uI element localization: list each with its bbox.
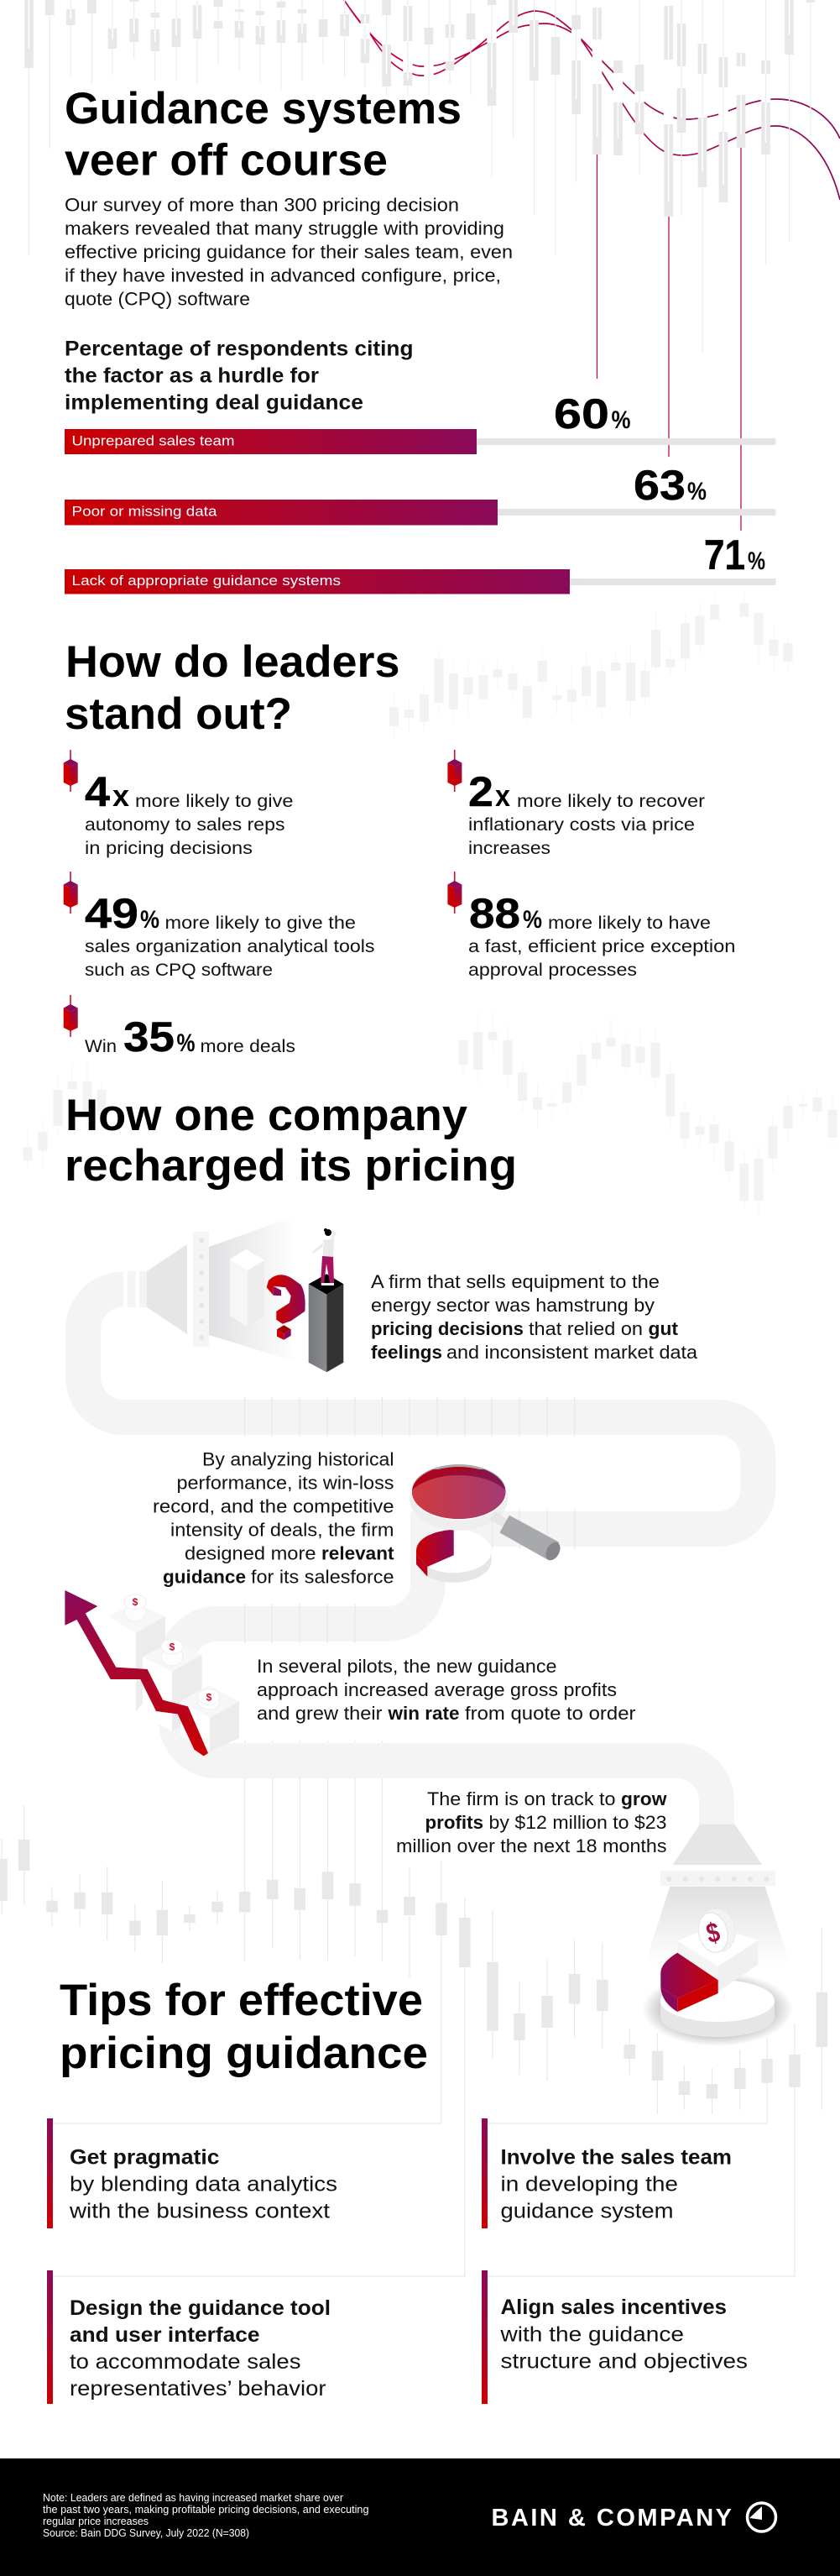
coins: $ [206, 1691, 212, 1703]
text: step 1 [371, 1271, 698, 1363]
connector lines [597, 148, 741, 531]
stat: 49%: more likely to give the [164, 913, 356, 933]
icon: candlestick [447, 872, 462, 914]
text: step 3: In several pilots, the new guidance [257, 1656, 557, 1677]
text: step 4: The firm is on track to [427, 1788, 616, 1809]
projector [128, 1216, 296, 1362]
tip: design the guidance tool: and user interface [70, 2323, 260, 2347]
platform [642, 1972, 793, 2046]
bar: lack of appropriate guidance systems 71%: 71 [704, 531, 745, 579]
footnote [43, 2492, 369, 2539]
tip: get pragmatic: Get pragmatic [70, 2146, 220, 2170]
bar: poor or missing data 63% [65, 462, 775, 526]
tip: get pragmatic: with the business context [69, 2200, 330, 2223]
text: step 2: for its salesforce [251, 1567, 394, 1587]
icon: candlestick [64, 872, 78, 914]
text: step 4: million over the next 18 months [396, 1835, 666, 1856]
bar: lack of appropriate guidance systems 71%: Lack of appropriate guidance systems [72, 573, 341, 589]
bar: lack of appropriate guidance systems 71% [65, 531, 775, 594]
bar: unprepared sales team 60%: % [611, 406, 631, 434]
wave lines [344, 0, 840, 200]
stat: 49%: sales organization analytical tools [85, 936, 374, 956]
section heading: how one company recharged its pricing: How one company [65, 1091, 468, 1140]
stat: 88%: more likely to have [548, 913, 711, 933]
text: step 4: profits [425, 1812, 483, 1833]
candlestick background: top [29, 0, 811, 353]
stat: 35%: % [176, 1029, 195, 1057]
tip: design the guidance tool: Design the guidance tool [70, 2296, 331, 2320]
pie slice [660, 1953, 718, 2012]
text: step 4: by $12 million to $23 [488, 1812, 666, 1833]
stat: 2x: more likely to recover [517, 791, 705, 811]
stat: 4x: in pricing decisions [85, 838, 253, 858]
tip: align sales incentives: Align sales incentives [500, 2296, 727, 2319]
pie chart [416, 1529, 492, 1583]
stat: 49%: 49 [85, 890, 138, 937]
tip: align sales incentives: with the guidance [499, 2322, 684, 2346]
stat: 4x: autonomy to sales reps [85, 814, 285, 835]
illustration: projector with coin and pie on platform [642, 1825, 793, 2046]
tip: get pragmatic: by blending data analytics [70, 2173, 337, 2196]
tip: design the guidance tool: to accommodate sales [70, 2350, 300, 2374]
illustration: person on pillar, question mark and projector [128, 1216, 343, 1372]
section heading: how one company recharged its pricing [65, 1091, 517, 1191]
text: step 2: designed more [185, 1543, 316, 1563]
chart heading: the factor as a hurdle for [65, 364, 319, 388]
stat: 2x: x [495, 778, 510, 813]
text: step 3 [257, 1656, 636, 1724]
chart heading [65, 338, 413, 415]
bar: poor or missing data 63%: % [687, 478, 707, 505]
text: step 1: pricing decisions [371, 1318, 524, 1339]
text: step 1: gut [648, 1318, 679, 1339]
footnote: the past two years, making profitable pricing decisions, and executing [43, 2504, 369, 2516]
chart heading: implementing deal guidance [65, 391, 363, 415]
projector [644, 1825, 790, 1965]
candlestick background: bottom [2, 1741, 822, 2276]
intro text [65, 195, 513, 309]
text: step 1: energy sector was hamstrung by [371, 1295, 655, 1316]
stat: 2x: 2 [468, 768, 493, 815]
stat: 2x: inflationary costs via price [468, 814, 695, 835]
icon: candlestick [447, 750, 462, 792]
stat: 88%: 88 [469, 890, 520, 937]
coins [124, 1594, 220, 1709]
text: step 2: intensity of deals, the firm [170, 1520, 394, 1540]
cubes [108, 1604, 239, 1751]
tip: design the guidance tool [47, 2270, 331, 2404]
stat: 35%: more deals [200, 1036, 295, 1056]
candlestick background: company [28, 1012, 832, 1217]
tip: design the guidance tool: representatives’ behavior [70, 2377, 326, 2401]
text: step 3: win rate [387, 1703, 460, 1724]
title [65, 84, 462, 185]
text: step 2 [153, 1449, 394, 1587]
text: step 3: from quote to order [465, 1703, 636, 1724]
coins: $ [170, 1641, 175, 1652]
tip: involve the sales team: in developing the [500, 2173, 678, 2196]
bar chart [65, 148, 775, 594]
bar: lack of appropriate guidance systems 71%: % [748, 547, 765, 575]
footnote: regular price increases [43, 2516, 149, 2527]
stat: 2x [447, 750, 705, 858]
text: step 2: By analyzing historical [202, 1449, 394, 1469]
section heading: tips [60, 1976, 428, 2078]
intro text: effective pricing guidance for their sales team, even [65, 242, 513, 262]
stat: 88% [447, 872, 735, 980]
stat: 35%: Win [85, 1036, 117, 1056]
text: step 4 [396, 1788, 667, 1856]
text: step 1: and inconsistent market data [446, 1342, 698, 1363]
logo: Bain & Company: BAIN & COMPANY [492, 2505, 732, 2531]
stat: 4x [64, 750, 293, 858]
stat: 49%: % [140, 906, 159, 934]
text: step 2: performance, its win-loss [176, 1473, 394, 1493]
pillar [309, 1274, 343, 1372]
stat: 49%: such as CPQ software [85, 960, 273, 980]
stat: 88%: a fast, efficient price exception [468, 936, 735, 956]
text: step 1: that relied on [529, 1318, 643, 1339]
section heading: tips: Tips for effective [60, 1976, 423, 2025]
intro text: quote (CPQ) software [65, 289, 250, 309]
stat: 88%: % [523, 906, 542, 934]
bar: unprepared sales team 60%: Unprepared sales team [72, 433, 235, 448]
intro text: Our survey of more than 300 pricing decision [65, 195, 459, 215]
stat: 4x: more likely to give [135, 791, 294, 811]
text: step 3: approach increased average gross profits [257, 1679, 617, 1700]
coins: $ [133, 1596, 138, 1608]
intro text: makers revealed that many struggle with providing [65, 218, 504, 238]
text: step 2: relevant [321, 1543, 394, 1563]
bar: unprepared sales team 60% [65, 390, 775, 454]
coin: $ [703, 1916, 723, 1949]
arrow [65, 1590, 208, 1756]
text: step 3: and grew their [257, 1703, 383, 1724]
stat: 2x: increases [468, 838, 550, 858]
stat: 88%: approval processes [468, 960, 637, 980]
chart heading: Percentage of respondents citing [65, 338, 413, 361]
bar: unprepared sales team 60%: 60 [554, 390, 609, 437]
illustration: magnifying glass and pie [405, 1464, 563, 1583]
tip: get pragmatic [47, 2118, 337, 2228]
magnifying glass [405, 1464, 563, 1563]
text: step 1: A firm that sells equipment to the [371, 1271, 660, 1292]
title: veer off course [65, 136, 388, 185]
stat: 35% [64, 995, 295, 1060]
white box [230, 1249, 264, 1327]
illustration: rising arrow over cubes with coins [65, 1590, 239, 1756]
section heading: how do leaders stand out: How do leaders [65, 637, 399, 687]
bar: poor or missing data 63%: 63 [634, 462, 686, 509]
footnote: Source: Bain DDG Survey, July 2022 (N=308) [43, 2527, 249, 2539]
coin [694, 1905, 740, 1956]
bar: poor or missing data 63%: Poor or missing data [72, 504, 217, 519]
tip: involve the sales team: Involve the sales team [500, 2146, 732, 2170]
winding road [83, 1290, 759, 1826]
section heading: how do leaders stand out [65, 637, 399, 739]
footnote: Note: Leaders are defined as having increased market share over [43, 2492, 343, 2504]
icon: question mark [267, 1275, 305, 1340]
icon: candlestick [64, 750, 78, 792]
section heading: tips: pricing guidance [60, 2029, 428, 2078]
intro text: if they have invested in advanced configure, price, [65, 265, 501, 285]
tip: align sales incentives: structure and objectives [500, 2349, 748, 2373]
section heading: how one company recharged its pricing: recharged its pricing [65, 1141, 517, 1191]
text: step 2: guidance [163, 1567, 246, 1587]
text: step 4: grow [621, 1788, 667, 1809]
icon: candlestick [64, 995, 78, 1037]
stat: 35%: 35 [123, 1013, 175, 1060]
cube [677, 1926, 758, 1992]
stat: 4x: x [112, 778, 129, 813]
stat: 49% [64, 872, 374, 980]
title: Guidance systems [65, 84, 462, 134]
candlestick background: leaders [394, 592, 788, 736]
text: step 1: feelings [371, 1342, 442, 1363]
text: step 2: record, and the competitive [153, 1496, 394, 1516]
tip: involve the sales team: guidance system [500, 2200, 673, 2223]
section heading: how do leaders stand out: stand out? [65, 689, 292, 739]
stat: 4x: 4 [85, 768, 110, 815]
tip: involve the sales team [482, 2118, 732, 2228]
footer [0, 2458, 840, 2576]
person [312, 1228, 337, 1285]
tip: align sales incentives [482, 2270, 748, 2404]
